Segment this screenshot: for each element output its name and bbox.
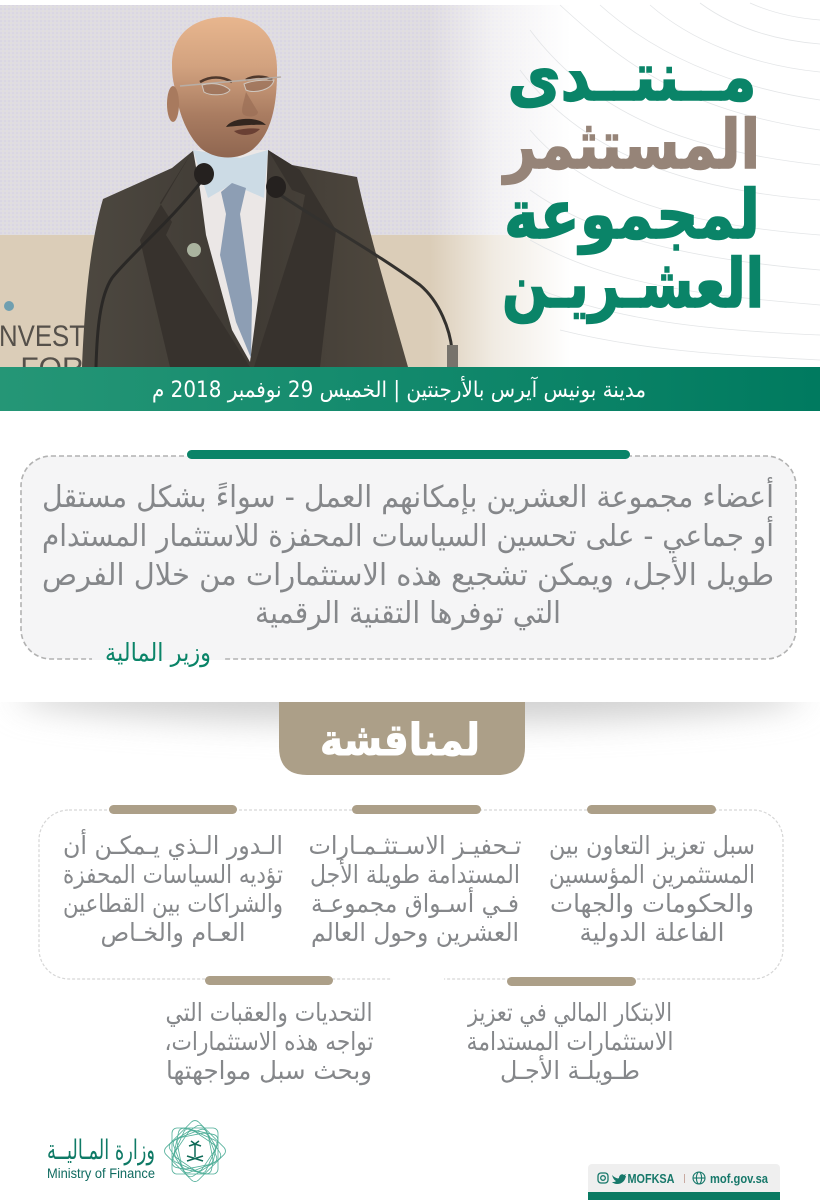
topic 4: الابتكار المالي في تعزيز [466, 998, 672, 1027]
topic 3 [63, 805, 283, 948]
shirt [193, 150, 268, 362]
date band [0, 367, 820, 411]
date band: مدينة بونيس آيرس بالأرجنتين | الخميس 29 نوفمبر 2018 م [152, 376, 646, 403]
topic 1: المستثمرين المؤسسين [549, 860, 755, 889]
topic 1 [549, 805, 755, 948]
title [501, 38, 764, 324]
quote text: أو جماعي - على تحسين السياسات المحفزة للاستثمار المستدام [42, 515, 774, 554]
icon: twitter [612, 1174, 626, 1184]
title: مــنتــدى [508, 38, 756, 117]
quote text: التي توفرها التقنية الرقمية [255, 596, 561, 631]
topic 2 [308, 805, 522, 948]
quote text [42, 476, 774, 631]
topic 3: والشراكات بين القطاعين [63, 889, 283, 919]
icon: instagram [598, 1173, 608, 1183]
photo: speaker at podium: NVEST [0, 320, 85, 353]
topic 2: فـي أسـواق مجموعـة [311, 886, 519, 918]
heading: discussion tab: لمناقشة [320, 715, 480, 766]
topic 2: تـحفيـز الاسـتثـمـارات [308, 831, 522, 860]
heading: discussion tab [18, 702, 802, 775]
topic 3: العـام والخـاص [100, 918, 246, 948]
topic 4 [466, 977, 674, 1085]
contact bar: MOFKSA [628, 1171, 675, 1186]
microphones [96, 178, 204, 367]
suit [82, 150, 408, 367]
topic 2: العشرين وحول العالم [311, 918, 519, 948]
icon: rosette emblem [162, 1118, 228, 1184]
head [172, 17, 277, 158]
title: لمجموعة [504, 176, 760, 255]
photo: speaker at podium [0, 5, 571, 385]
topic 4: الاستثمارات المستدامة [466, 1027, 674, 1056]
contact bar: mof.gov.sa [710, 1171, 769, 1186]
decorative line pattern [520, 3, 820, 360]
panel: discussion topics [39, 805, 783, 1086]
quote text: طويل الأجل، ويمكن تشجيع هذه الاستثمارات من خلال الفرص [42, 555, 774, 593]
quote attribution: وزير المالية [105, 638, 211, 668]
logo: Ministry of Finance: Ministry of Finance [47, 1165, 155, 1181]
logo: Ministry of Finance: وزارة المـاليــة [47, 1135, 155, 1166]
title: المستثمر [501, 106, 760, 185]
icon: globe [693, 1172, 705, 1184]
panel: quote [21, 450, 796, 668]
topic 1: سبل تعزيز التعاون بين [549, 831, 755, 861]
topic 3: الـدور الـذي يـمكـن أن [63, 828, 283, 861]
tie [220, 183, 252, 358]
contact bar [588, 1164, 780, 1200]
topic 2: المستدامة طويلة الأجل [310, 858, 520, 889]
topic 1: الفاعلة الدولية [580, 918, 724, 948]
lapels [140, 150, 250, 367]
topic 1: والحكومات والجهات [550, 889, 754, 919]
topic 5: تواجه هذه الاستثمارات، [164, 1027, 374, 1056]
quote text: أعضاء مجموعة العشرين بإمكانهم العمل - سواءً بشكل مستقل [42, 476, 774, 515]
topic 5 [164, 976, 374, 1086]
photo: speaker at podium: FOR [20, 352, 84, 385]
topic 5: وبحث سبل مواجهتها [166, 1056, 372, 1086]
topic 4: طـويلـة الأجـل [500, 1054, 640, 1085]
topic 5: التحديات والعقبات التي [166, 998, 372, 1028]
logo: Ministry of Finance [47, 1118, 228, 1184]
topic 3: تؤديه السياسات المحفزة [63, 860, 283, 889]
